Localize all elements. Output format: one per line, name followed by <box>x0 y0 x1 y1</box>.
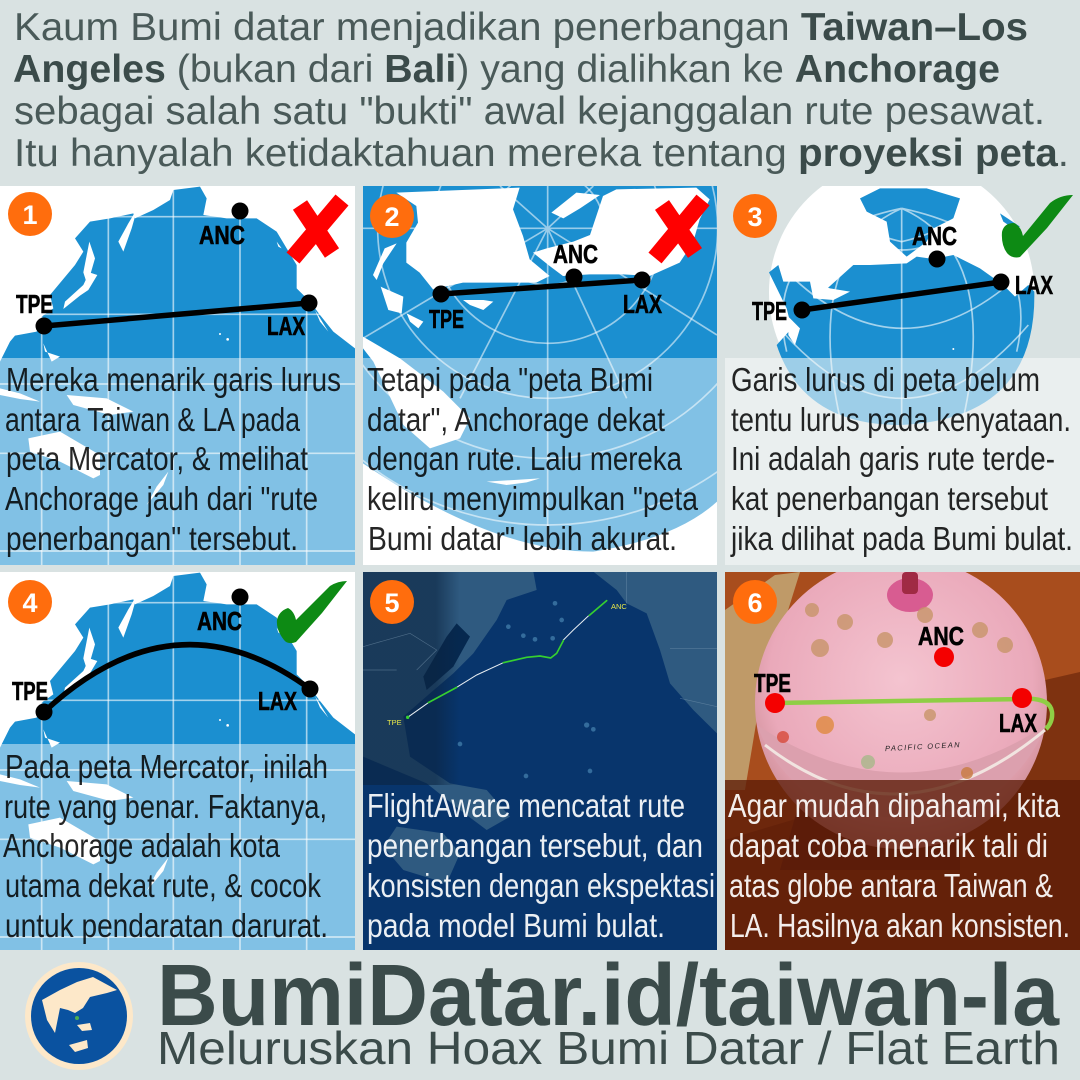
text overlay <box>363 358 717 565</box>
title heading: sebagai salah satu "bukti" awal kejanggalan rute pesawat. <box>14 90 1045 133</box>
azimuthal map <box>363 186 717 565</box>
globe map <box>769 160 1034 425</box>
pink globe <box>755 557 1047 849</box>
badge 2: 2 <box>384 202 400 232</box>
badge 2 <box>370 194 414 238</box>
panel 5 text: konsisten dengan ekspektasi <box>367 867 715 904</box>
icon: green check <box>1002 195 1073 258</box>
panel 4 text: utama dekat rute, & cocok <box>5 867 321 904</box>
Mercator map <box>0 572 355 951</box>
text overlay <box>0 744 355 950</box>
text overlay <box>0 358 355 565</box>
badge 6: 6 <box>747 588 763 618</box>
airport labels: ANC <box>912 221 957 251</box>
logo: globe <box>25 962 133 1070</box>
airport labels <box>12 606 297 716</box>
badge 1 <box>8 192 52 236</box>
panel 1 text: peta Mercator, & melihat <box>6 440 308 477</box>
panel 4 text: untuk pendaratan darurat. <box>5 907 328 944</box>
panel 6 text <box>728 787 1070 944</box>
panel 1 text: Mereka menarik garis lurus <box>6 361 341 398</box>
airport labels <box>387 602 627 727</box>
website title: BumiDatar.id/taiwan-la <box>157 947 1060 1044</box>
icon: green check <box>277 581 347 643</box>
title heading: Itu hanyalah ketidaktahuan mereka tentang proyeksi peta. <box>14 132 1069 175</box>
airport labels: LAX <box>999 708 1037 738</box>
panel 2 text: datar", Anchorage dekat <box>367 401 665 438</box>
airport labels: TPE <box>754 668 791 698</box>
text overlay <box>725 358 1080 565</box>
panel 2 text <box>367 361 699 557</box>
panel 5 text <box>367 787 715 944</box>
overlay <box>725 780 1080 950</box>
flight route <box>406 601 607 719</box>
icon: red cross <box>293 200 342 258</box>
airport labels: ANC <box>199 220 245 250</box>
panel 5 text: penerbangan tersebut, dan <box>367 827 703 864</box>
badge 4: 4 <box>22 588 38 618</box>
panel 5 text: FlightAware mencatat rute <box>367 787 685 824</box>
airport labels: TPE <box>752 296 787 326</box>
badge 3: 3 <box>747 202 763 232</box>
panel 2 text: dengan rute. Lalu mereka <box>367 440 683 477</box>
airport labels: ANC <box>553 239 598 269</box>
panel 1 text: antara Taiwan & LA pada <box>5 401 301 438</box>
red markers <box>765 647 1032 713</box>
Mercator map <box>0 186 355 565</box>
dark map <box>363 572 717 952</box>
airport labels: LAX <box>623 289 662 319</box>
title heading <box>13 6 1069 175</box>
route line <box>36 202 318 334</box>
photo backdrop <box>725 572 1080 950</box>
airport labels: LAX <box>1015 270 1053 300</box>
icon: red cross <box>655 200 703 258</box>
route line <box>794 250 1010 318</box>
panel 2 text: Bumi datar" lebih akurat. <box>368 520 677 557</box>
airport labels: TPE <box>387 718 402 727</box>
airport labels: ANC <box>197 606 242 636</box>
airport labels: ANC <box>918 621 964 651</box>
airport labels: TPE <box>16 289 53 319</box>
title heading: Kaum Bumi datar menjadikan penerbangan Taiwan–Los <box>14 6 1028 49</box>
panel 2 text: Tetapi pada "peta Bumi <box>367 361 653 398</box>
panel 1 text: penerbangan" tersebut. <box>6 520 298 557</box>
panel 2: flat earth map <box>363 186 717 565</box>
panel 4 text: Anchorage adalah kota <box>3 827 281 864</box>
route line <box>432 268 650 302</box>
title heading: Angeles (bukan dari Bali) yang dialihkan ke Anchorage <box>13 48 1000 91</box>
airport labels: TPE <box>12 676 48 706</box>
badge 4 <box>8 580 52 624</box>
panel 4 text: Pada peta Mercator, inilah <box>5 748 328 785</box>
panel 1 text: Anchorage jauh dari "rute <box>5 480 318 517</box>
panel 5 text: pada model Bumi bulat. <box>367 907 665 944</box>
airport labels: LAX <box>267 311 305 341</box>
airport labels: TPE <box>429 304 464 334</box>
panel 4 text <box>3 748 328 944</box>
badge 5 <box>370 580 414 624</box>
panel 4: great circle on Mercator <box>0 572 355 951</box>
panel 2 text: keliru menyimpulkan "peta <box>367 480 699 517</box>
panel 3 text <box>730 361 1073 557</box>
panel 6: globe photo <box>725 557 1080 950</box>
badge 3 <box>733 194 777 238</box>
panel 1 text <box>5 361 341 557</box>
panel 5: FlightAware track <box>363 572 717 952</box>
pink globe: PACIFIC OCEAN <box>885 740 961 753</box>
airport labels <box>754 621 1037 738</box>
airport labels: ANC <box>611 602 627 611</box>
panel 3: globe <box>725 160 1080 565</box>
badge 5: 5 <box>384 588 400 618</box>
airport labels <box>752 226 1054 320</box>
green string <box>775 699 1052 729</box>
panel 1: straight line on Mercator <box>0 186 355 565</box>
badge 1: 1 <box>22 200 38 230</box>
airport labels <box>429 244 662 328</box>
tagline: Meluruskan Hoax Bumi Datar / Flat Earth <box>157 1022 1060 1074</box>
badge 6 <box>733 580 777 624</box>
panel 4 text: rute yang benar. Faktanya, <box>4 788 327 825</box>
airport labels: LAX <box>258 686 297 716</box>
curved route <box>36 588 318 720</box>
airport labels <box>16 220 305 341</box>
